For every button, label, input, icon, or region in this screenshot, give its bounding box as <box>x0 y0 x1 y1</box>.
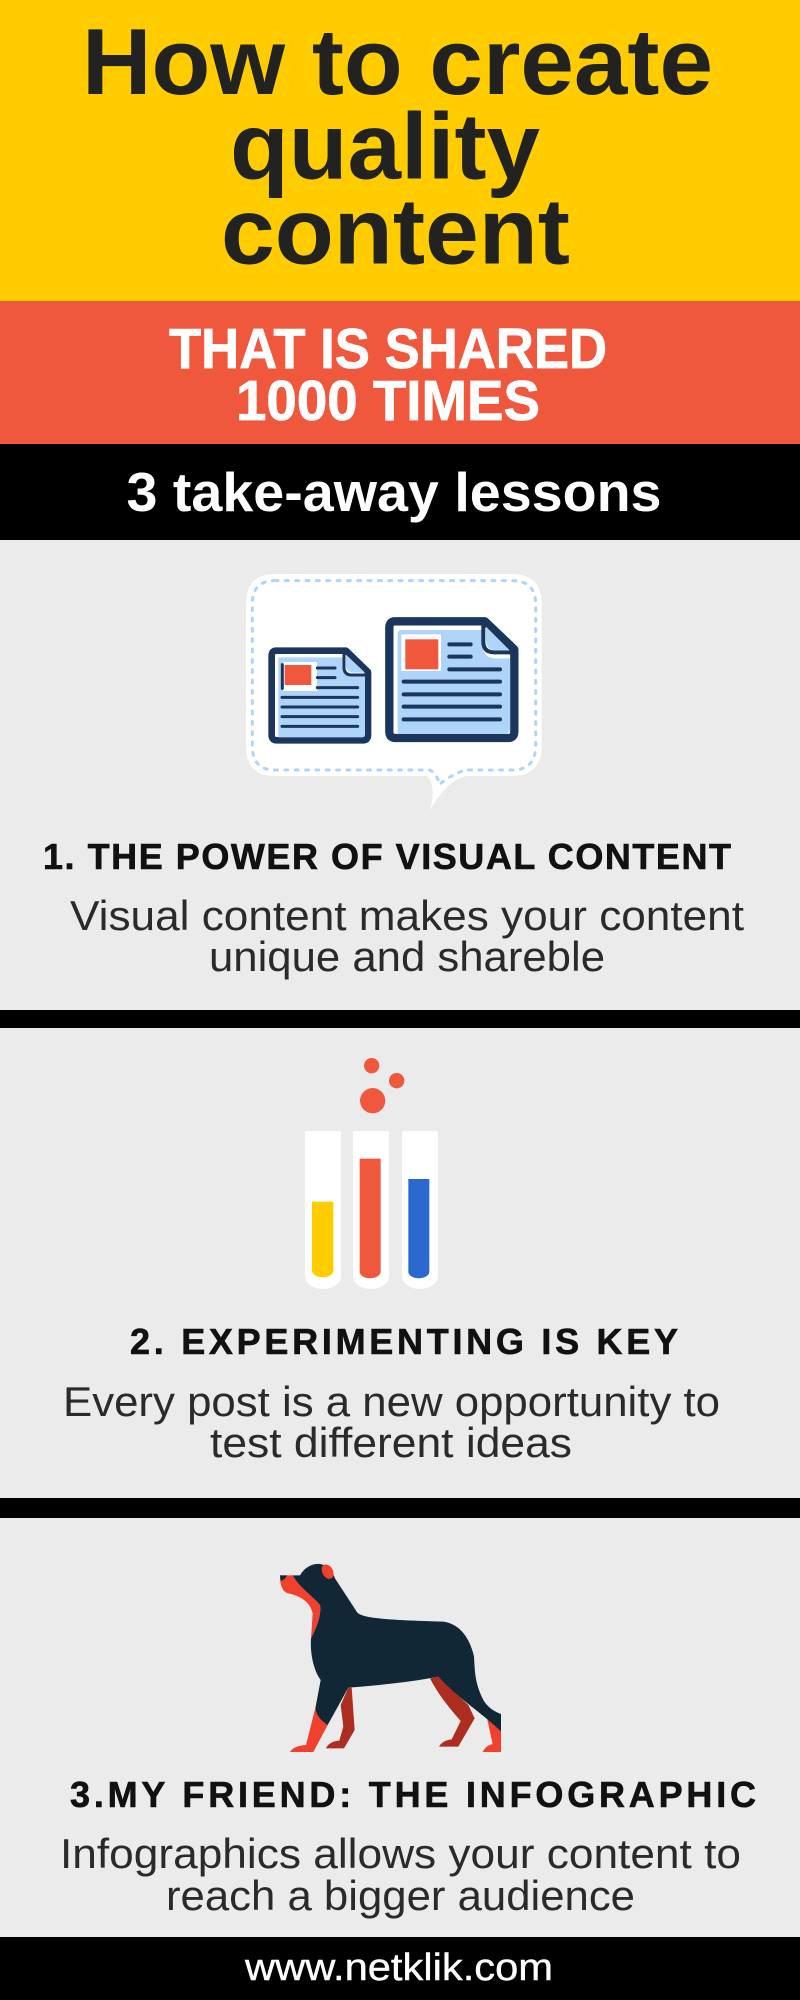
title: quality <box>230 94 540 198</box>
text: lesson 2 <box>63 1378 720 1466</box>
panel: lesson 2 <box>63 1058 720 1466</box>
subtitle text <box>169 317 607 433</box>
panel: title <box>0 0 800 301</box>
subtitle text: THAT IS SHARED <box>169 317 607 381</box>
icon: speech bubble with documents <box>246 574 542 811</box>
icon: large document <box>389 621 514 738</box>
text: lesson 2: test different ideas <box>210 1419 572 1466</box>
text: lesson 3 <box>60 1830 741 1919</box>
panel: lesson 1 <box>43 574 744 980</box>
panel: lessons banner <box>0 444 800 540</box>
text: lesson 1: Visual content makes your content <box>70 892 744 939</box>
footer url: www.netklik.com <box>244 1947 553 1989</box>
title: How to create <box>82 9 713 114</box>
text: lesson 1 <box>70 892 744 980</box>
title: content <box>221 178 570 284</box>
panel: lesson 3 <box>60 1562 756 1919</box>
subtitle text: 1000 TIMES <box>236 369 540 433</box>
text: lesson 2: Every post is a new opportunity to <box>63 1378 720 1425</box>
heading: lesson 1: 1. THE POWER OF VISUAL CONTENT <box>43 836 731 877</box>
text: lesson 1: unique and shareble <box>209 933 605 980</box>
text: lesson 3: reach a bigger audience <box>166 1872 635 1919</box>
icon: small document <box>272 651 368 740</box>
icon: dog <box>280 1562 501 1752</box>
heading: lesson 2: 2. EXPERIMENTING IS KEY <box>130 1321 678 1362</box>
panel: footer <box>0 1937 800 2000</box>
title <box>82 9 713 284</box>
text: lesson 3: Infographics allows your content to <box>60 1830 741 1877</box>
panel: subtitle <box>0 301 800 444</box>
icon: test tubes <box>305 1058 438 1289</box>
banner text: 3 take-away lessons <box>126 461 662 523</box>
heading: lesson 3: 3.MY FRIEND: THE INFOGRAPHIC <box>70 1774 756 1815</box>
